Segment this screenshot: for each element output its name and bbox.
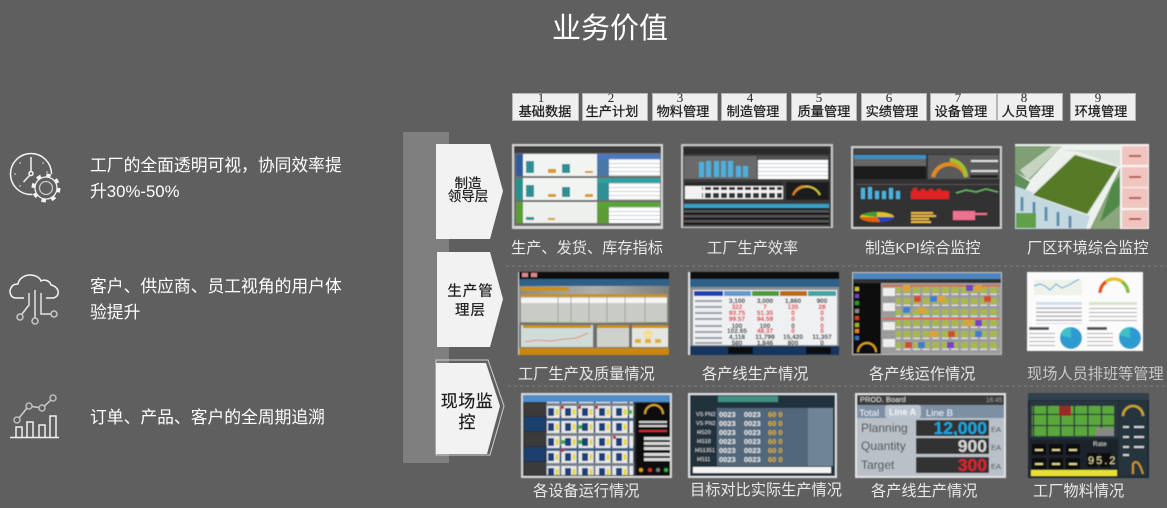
label: production board: 各产线生产情况 [871,483,977,500]
label: campus environment: 厂区环境综合监控 [1027,239,1148,257]
screenshot: production board: 12,000 [933,418,987,438]
module 7 [930,90,996,120]
label: target vs actual: 目标对比实际生产情况 [690,482,842,499]
screenshot: target vs actual: VS PN2 [696,412,716,418]
text: user experience: 客户、供应商、员工视角的用户体 [90,277,342,296]
screenshot: line production table: 100 [732,323,743,330]
screenshot: target vs actual: 60 0 [768,410,783,419]
screenshot: line production table: 0 [820,323,824,330]
screenshot: production board: EA [991,425,1001,434]
screenshot: line production table: 11,799 [755,334,775,341]
screenshot: line production table: 99.57 [729,316,746,323]
module 4 [722,90,786,120]
screenshot: staff scheduling [1027,272,1143,351]
screenshot: line production table: 4,118 [729,334,745,341]
screenshot: line production table: 15,420 [783,334,803,341]
screenshot: production board: EA [991,443,1001,452]
screenshot: target vs actual: 0023 [744,455,761,464]
screenshot: line production table: 93.75 [729,310,746,317]
screenshot: line production table: 0 [820,328,824,335]
module 6 [862,90,926,120]
screenshot: factory efficiency [681,144,833,228]
screenshot: target vs actual: 60 0 [768,446,783,455]
label: staff scheduling: 现场人员排班等管理 [1027,365,1164,383]
layer tag: leadership: 制造 [454,176,482,191]
module 1: 1 [538,90,544,105]
label: production shipping inventory: 生产、发货、库存指标 [511,240,663,257]
module 3: 3 [677,90,683,105]
module 2: 2 [608,90,614,105]
screenshot: target vs actual: 0023 [744,410,761,419]
screenshot: target vs actual: HS18 [697,439,711,445]
screenshot: line production table: 7 [763,304,767,311]
label: line operation: 各产线运作情况 [869,366,975,383]
screenshot: line production table: 0 [791,328,795,335]
module 8: 人员管理 [1002,104,1054,119]
screenshot: equipment status [521,393,672,478]
screenshot: line production table: 28 [818,304,826,311]
screenshot: line production table: 322 [732,304,743,311]
screenshot: production board: 300 [958,455,987,475]
module 5: 质量管理 [798,104,850,119]
screenshot: line production table: 135 [788,304,799,311]
screenshot: line production table: 800 [788,340,799,347]
module 1 [512,90,578,120]
screenshot: target vs actual: 0023 [719,437,736,446]
screenshot: target vs actual: 0023 [719,455,736,464]
screenshot: line production table: 0 [791,310,795,317]
text: factory transparency: 工厂的全面透明可视，协同效率提 [90,156,342,175]
screenshot: material status [1028,393,1149,478]
screenshot: line production table: 0 [791,323,795,330]
label: factory efficiency: 工厂生产效率 [707,240,798,257]
screenshot: line production table: 0 [820,340,824,347]
icon: cloud circuit [10,275,58,324]
text: factory transparency: 升30%-50% [90,182,180,201]
screenshot: target vs actual: 0023 [744,428,761,437]
screenshot: production board: PROD. Board [860,395,906,404]
screenshot: factory production and quality [518,272,669,355]
module 6: 6 [886,90,893,105]
module 9 [1070,90,1136,120]
screenshot: target vs actual: 60 0 [768,455,783,464]
screenshot: target vs actual: HS1351 [695,448,715,454]
screenshot: line production table: 11,357 [812,334,832,341]
layer tag: leadership: 领导层 [448,189,488,204]
screenshot: campus environment [1015,144,1149,229]
screenshot: target vs actual: 0023 [719,419,736,428]
screenshot: line operation [852,272,1002,355]
screenshot: production board: EA [991,462,1001,471]
screenshot: production board: 16:45 [986,397,1003,404]
screenshot: production shipping inventory [512,144,663,229]
screenshot: target vs actual [688,393,837,478]
row divider [506,266,1167,386]
screenshot: target vs actual: 0023 [744,419,761,428]
screenshot: production board: Planning [861,421,908,435]
layer tag: shop floor monitoring [436,360,504,455]
module header row [512,90,1136,120]
module 8 [998,90,1062,120]
screenshot: target vs actual: 0023 [719,428,736,437]
layer tag: shop floor monitoring: 现场监 [441,392,493,411]
layer tag: production management [437,252,503,347]
screenshot: line production table: 0 [820,316,824,323]
screenshot: line production table: 900 [817,298,828,305]
module 1: 基础数据 [519,104,571,119]
screenshot: line production table: 1,860 [785,298,802,305]
layer tag: production management: 生产管 [447,283,494,300]
screenshot: line production table: 580 [732,340,743,347]
screenshot: production board: Total [859,408,879,419]
layer tag: shop floor monitoring: 控 [458,413,476,432]
layer stack side bar [403,132,449,463]
screenshot: production board [855,393,1006,478]
screenshot: line production table: 100 [760,323,771,330]
module 6: 实绩管理 [866,104,918,119]
screenshot: line production table: 48.37 [757,328,774,335]
module 2: 生产计划 [586,104,638,119]
screenshot: target vs actual: HS20 [697,430,711,436]
screenshot: target vs actual: VS PN2 [696,421,716,427]
module 7: 设备管理 [935,103,987,119]
screenshot: target vs actual: HS11 [697,457,710,463]
icon: clock with gear [10,154,61,203]
screenshot: target vs actual: 0023 [719,446,736,455]
screenshot: KPI dashboard [851,146,1002,229]
screenshot: production board: Target [861,458,895,472]
module 2 [582,90,648,120]
layer tag: production management: 理层 [455,303,486,319]
screenshot: line production table: 102.65 [727,328,747,335]
value item: factory transparency [10,154,342,203]
label: KPI dashboard: 制造KPI综合监控 [865,240,981,257]
layer tag: leadership [436,144,503,239]
module 8: 8 [1021,90,1027,105]
screenshot: production board: Line B [926,408,953,419]
screenshot: production board: 900 [958,436,987,456]
label: factory production and quality: 工厂生产及质量情况 [518,366,655,383]
title: 业务价值 [552,12,668,45]
value item: traceability [10,395,325,438]
screenshot: target vs actual: 0023 [744,437,761,446]
text: user experience: 验提升 [90,303,140,322]
value item: user experience [10,275,342,324]
screenshot: production board: Quantity [861,439,906,453]
screenshot: line production table: 3,100 [729,298,746,305]
text: traceability: 订单、产品、客户的全周期追溯 [90,408,325,427]
screenshot: material status: 95.2 [1088,455,1117,467]
screenshot: production board: Line A [889,407,917,417]
module 3: 物料管理 [657,104,709,119]
module 3 [652,90,718,120]
screenshot: line production table: 0 [820,310,824,317]
screenshot: line production table [688,272,839,355]
module 4: 制造管理 [727,104,779,119]
module 4: 4 [747,90,754,105]
screenshot: line production table: 51.35 [757,310,774,317]
label: equipment status: 各设备运行情况 [533,483,639,500]
screenshot: target vs actual: 0023 [744,446,761,455]
screenshot: target vs actual: 0023 [719,410,736,419]
module 9: 9 [1095,90,1101,105]
screenshot: line production table: 0 [791,316,795,323]
screenshot: line production table: 1,846 [757,340,774,347]
screenshot: target vs actual: 60 0 [768,419,783,428]
screenshot: line production table: 3,000 [757,298,774,305]
screenshot: target vs actual: 60 0 [768,428,783,437]
module 5: 5 [816,90,822,105]
icon: trend bar chart [10,395,59,438]
module 5 [792,90,856,120]
label: line production table: 各产线生产情况 [702,366,808,383]
module 7: 7 [955,90,962,105]
screenshot: target vs actual: 60 0 [768,437,783,446]
module 9: 环境管理 [1075,104,1127,119]
screenshot: material status: Rate [1093,441,1107,448]
screenshot: line production table: 94.59 [757,316,774,323]
label: material status: 工厂物料情况 [1033,483,1124,500]
